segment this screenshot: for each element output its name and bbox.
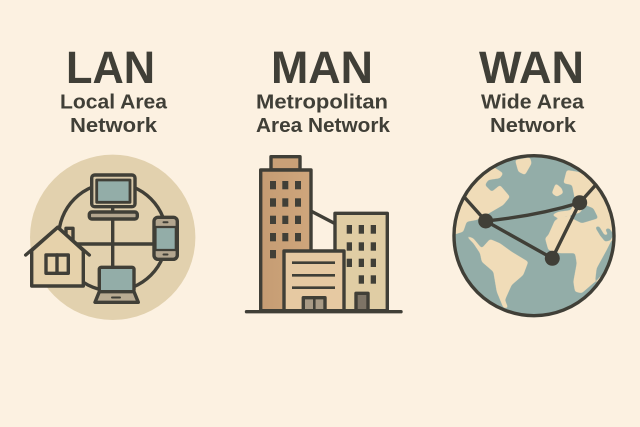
MAN subtitle: Metropolitan xyxy=(256,91,388,113)
MAN subtitle: Area Network xyxy=(256,115,391,137)
continents xyxy=(450,157,620,308)
LAN heading: LAN xyxy=(66,42,155,93)
WAN subtitle xyxy=(481,91,585,137)
LAN network illustration xyxy=(26,155,195,320)
icon: laptop xyxy=(95,267,138,302)
ground line xyxy=(246,310,401,313)
panel: MAN xyxy=(246,42,401,312)
network ring and links xyxy=(59,183,167,291)
icon: smartphone xyxy=(154,217,177,259)
beige backdrop circle xyxy=(30,155,195,320)
MAN subtitle xyxy=(256,91,391,137)
WAN subtitle: Wide Area xyxy=(481,91,585,113)
LAN subtitle xyxy=(60,91,168,137)
right building xyxy=(335,213,387,311)
front low building xyxy=(284,251,344,311)
network links xyxy=(464,186,595,258)
globe illustration xyxy=(450,156,620,316)
ocean xyxy=(454,156,614,316)
panel: LAN xyxy=(26,42,195,320)
tall tower xyxy=(261,157,311,311)
WAN heading: WAN xyxy=(479,42,584,93)
infographic canvas xyxy=(24,52,616,320)
icon: desktop computer xyxy=(89,175,137,219)
connecting link between buildings xyxy=(312,212,334,223)
LAN subtitle: Network xyxy=(70,115,158,137)
city buildings illustration xyxy=(246,157,401,312)
icon: house xyxy=(26,227,89,286)
globe outline xyxy=(454,156,614,316)
MAN heading: MAN xyxy=(271,42,373,93)
WAN subtitle: Network xyxy=(490,115,577,137)
network nodes xyxy=(478,195,587,266)
LAN subtitle: Local Area xyxy=(60,91,168,113)
panel: WAN xyxy=(450,42,620,316)
